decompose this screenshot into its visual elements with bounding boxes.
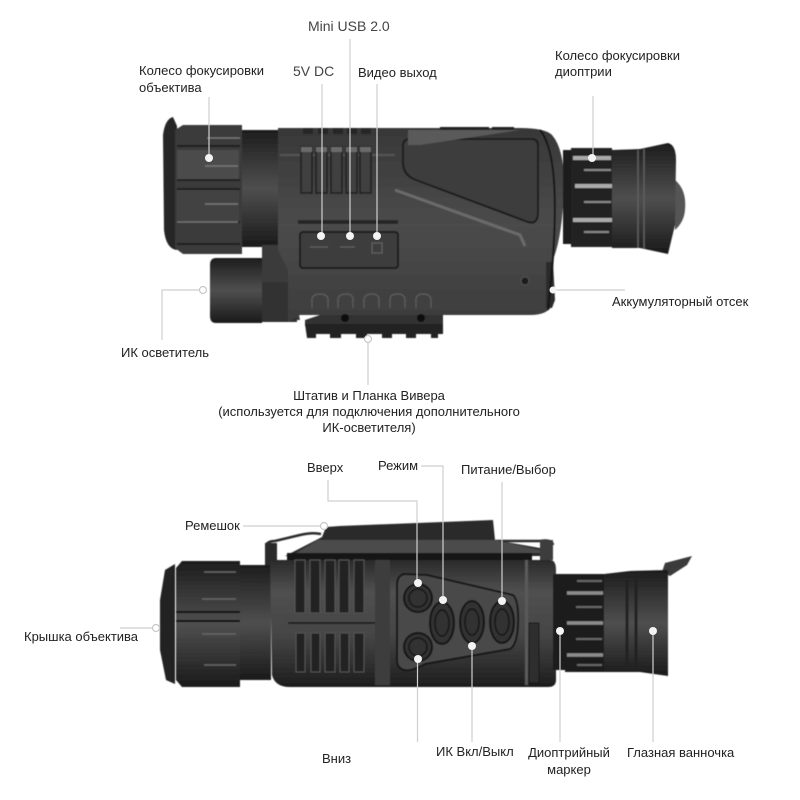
strap bbox=[265, 520, 553, 565]
port cover bbox=[300, 232, 398, 268]
hollow callout dots bbox=[152, 286, 372, 632]
label: tripod and Weaver rail: Штатив и Планка Вивера bbox=[293, 388, 445, 403]
label: power select: Питание/Выбор bbox=[461, 462, 556, 477]
callout dots bbox=[205, 154, 657, 663]
lens ring bbox=[176, 561, 240, 687]
device: monocular side view bbox=[163, 117, 685, 338]
strap shadow bbox=[287, 553, 532, 560]
main body bbox=[270, 553, 556, 687]
callout lines bbox=[120, 39, 653, 742]
diopter ring bbox=[553, 574, 604, 672]
lens neck bbox=[240, 565, 271, 680]
lens cap bbox=[163, 117, 177, 250]
label: IR on off: ИК Вкл/Выкл bbox=[436, 744, 514, 759]
label: Mini USB: Mini USB 2.0 bbox=[308, 18, 390, 34]
eyecup and flap bbox=[604, 556, 692, 676]
label: lens focus wheel: Колесо фокусировки bbox=[139, 63, 264, 78]
label: eyecup: Глазная ванночка bbox=[627, 745, 735, 760]
focus neck bbox=[242, 130, 278, 247]
lens cover bbox=[160, 564, 175, 684]
ribs bbox=[295, 560, 364, 672]
label: down: Вниз bbox=[322, 751, 351, 766]
top buttons bbox=[303, 128, 371, 134]
top ribs bbox=[301, 147, 371, 193]
label: strap: Ремешок bbox=[185, 518, 240, 533]
label: mode: Режим bbox=[378, 458, 418, 473]
IR illuminator bbox=[210, 245, 300, 323]
label: lens cover: Крышка объектива bbox=[24, 629, 139, 644]
diopter ring bbox=[563, 148, 612, 247]
label: tripod and Weaver rail: ИК-осветителя) bbox=[322, 420, 416, 435]
label: 5V DC: 5V DC bbox=[293, 63, 334, 79]
device: monocular top view bbox=[160, 520, 692, 687]
label: battery compartment: Аккумуляторный отсек bbox=[612, 294, 749, 309]
buttons bbox=[404, 584, 514, 661]
label: lens focus wheel: объектива bbox=[139, 80, 202, 95]
label: IR illuminator: ИК осветитель bbox=[121, 345, 209, 360]
main body bbox=[278, 127, 564, 322]
weaver rail bbox=[305, 314, 443, 338]
label: diopter marker: маркер bbox=[547, 762, 591, 777]
eyecup bbox=[612, 143, 685, 254]
label: diopter focus wheel: Колесо фокусировки bbox=[555, 48, 680, 63]
label: video output: Видео выход bbox=[358, 65, 437, 80]
lens focus ring bbox=[175, 125, 242, 254]
bottom ribs bbox=[312, 294, 431, 308]
label: diopter focus wheel: диоптрии bbox=[555, 64, 612, 79]
label: diopter marker: Диоптрийный bbox=[528, 745, 610, 760]
label: tripod and Weaver rail: (используется для подключения дополнительного bbox=[218, 404, 520, 419]
button panel bbox=[397, 574, 518, 670]
label: up: Вверх bbox=[307, 460, 344, 475]
